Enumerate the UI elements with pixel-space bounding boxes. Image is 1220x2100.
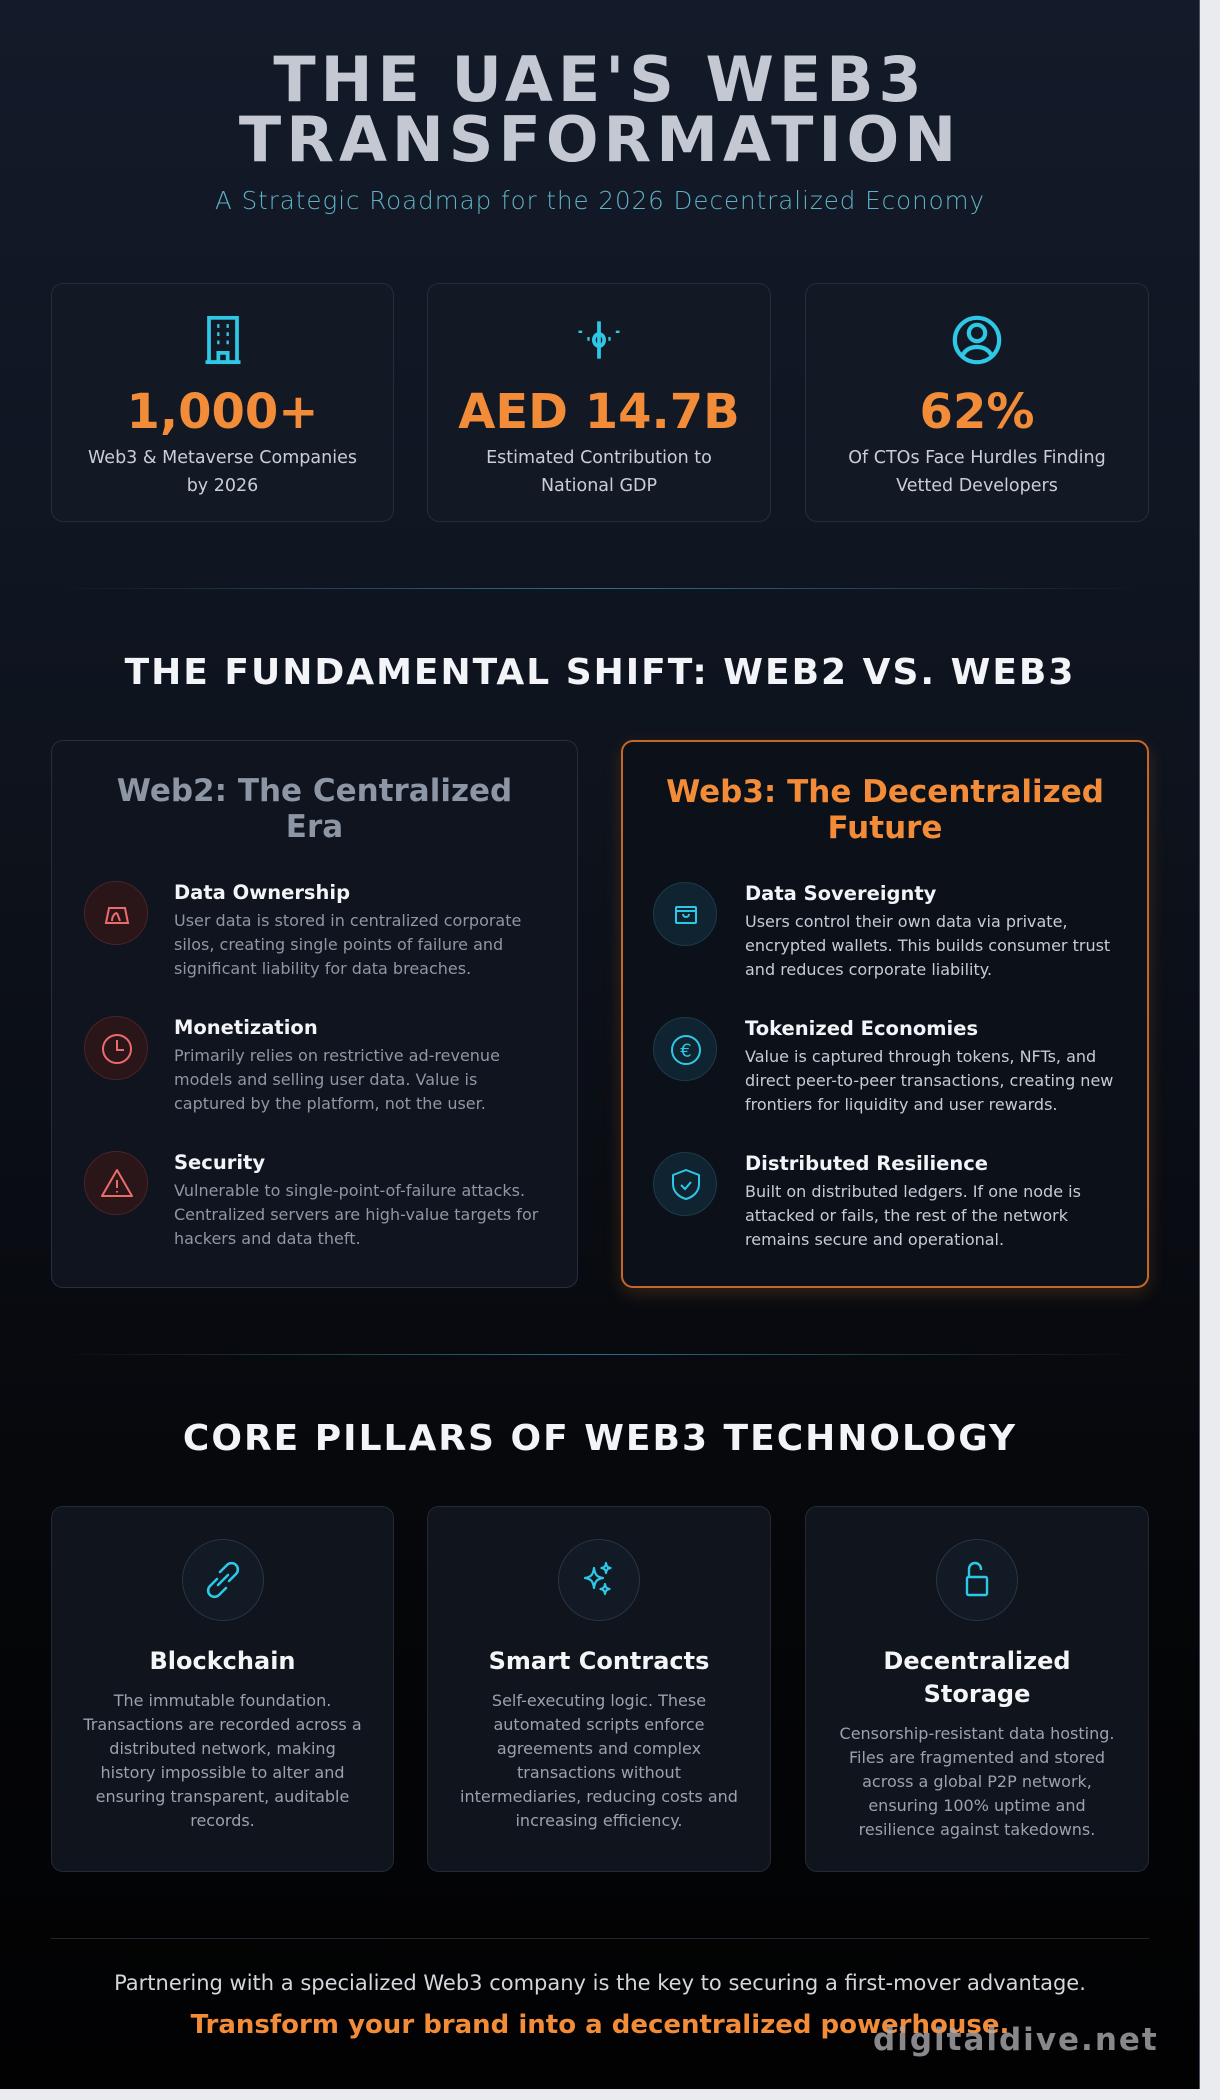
pillar: smart contracts [427,1506,771,1872]
title [239,43,961,176]
pillar: decentralized storage [805,1506,1149,1872]
icon: building [206,316,240,364]
pillar: decentralized storage: Storage [924,1680,1030,1708]
item: data sovereignty: Data Sovereignty [745,882,936,905]
item: tokenized economies: Value is captured through tokens, NFTs, and direct peer-to-peer transactions, creating new frontiers for liquidity and user rewards. [745,1047,1113,1114]
item: monetization: Monetization [174,1016,318,1039]
title: THE UAE'S WEB3 [273,43,927,116]
pillar: blockchain [51,1506,394,1872]
item: monetization: Primarily relies on restrictive ad-revenue models and selling user data. Value is captured by the platform, not the user. [174,1046,500,1113]
item: distributed resilience: Built on distributed ledgers. If one node is attacked or fails, the rest of the network remains secure and operational. [745,1182,1081,1249]
stat card: CTOs [805,283,1149,522]
item: data ownership: Data Ownership [174,881,350,904]
item: data sovereignty: Users control their own data via private, encrypted wallets. This builds consumer trust and reduces corporate liability. [745,912,1110,979]
item: data sovereignty [653,882,1110,979]
item: monetization [84,1016,500,1113]
stat card: GDP: Estimated Contribution to [486,448,712,468]
heading: fundamental shift: THE FUNDAMENTAL SHIFT: WEB2 VS. WEB3 [125,652,1075,693]
pillar: smart contracts: Self-executing logic. These automated scripts enforce agreements and complex transactions without intermediaries, reducing costs and increasing efficiency. [460,1691,738,1830]
panel: web2 [51,740,578,1288]
heading: web2: Web2: The Centralized [117,773,512,809]
stat card: GDP: National GDP [541,476,657,496]
item: data ownership [84,881,521,978]
stat card: GDP: AED 14.7B [458,384,740,440]
item: tokenized economies: Tokenized Economies [745,1017,978,1040]
item: tokenized economies [653,1017,1113,1114]
stat card: companies [51,283,394,522]
footer text: Partnering with a specialized Web3 company is the key to securing a first-mover advantage. [114,1971,1086,1995]
heading: web3: Web3: The Decentralized [666,774,1104,810]
stat card: CTOs: Vetted Developers [896,476,1058,496]
heading: core pillars: CORE PILLARS OF WEB3 TECHNOLOGY [183,1418,1017,1459]
stat card: CTOs: Of CTOs Face Hurdles Finding [848,448,1106,468]
stat card: companies: 1,000+ [126,384,319,440]
icon: link [182,1539,264,1621]
item: distributed resilience [653,1152,1081,1249]
stat card: CTOs: 62% [920,384,1034,440]
icon: sparkles [558,1539,640,1621]
pillar: smart contracts: Smart Contracts [489,1647,709,1675]
item: security [84,1151,538,1248]
item: distributed resilience: Distributed Resilience [745,1152,988,1175]
call to action: Transform your brand into a decentralized powerhouse. [191,2010,1009,2040]
icon: unlock [936,1539,1018,1621]
heading: web2 [117,773,512,845]
stat card: companies: by 2026 [187,476,258,496]
heading: web2: Era [286,809,343,845]
pillar: blockchain: The immutable foundation. Transactions are recorded across a distributed network, making history impossible to alter and ensuring transparent, auditable records. [83,1691,362,1830]
icon: value [578,321,620,359]
watermark: digitaldive.net [873,2022,1159,2058]
panel: web3 [621,740,1149,1288]
heading: web3: Future [828,810,942,846]
stat card: GDP [427,283,771,522]
item: security: Security [174,1151,265,1174]
icon: user circle [952,316,1002,364]
item: data ownership: User data is stored in centralized corporate silos, creating single points of failure and significant liability for data breaches. [174,911,521,978]
pillar: blockchain: Blockchain [149,1647,296,1675]
item: tokenized economies: € [680,1040,692,1062]
pillar: decentralized storage: Censorship-resistant data hosting. Files are fragmented and stored across a global P2P network, ensuring 100% uptime and resilience against takedowns. [840,1724,1114,1839]
pillar: decentralized storage: Decentralized [883,1647,1071,1675]
subtitle: A Strategic Roadmap for the 2026 Decentralized Economy [215,186,985,215]
item: security: Vulnerable to single-point-of-failure attacks. Centralized servers are high-value targets for hackers and data theft. [174,1181,538,1248]
stat card: companies: Web3 & Metaverse Companies [88,448,357,468]
heading: web3 [666,774,1104,846]
title: TRANSFORMATION [239,103,961,176]
